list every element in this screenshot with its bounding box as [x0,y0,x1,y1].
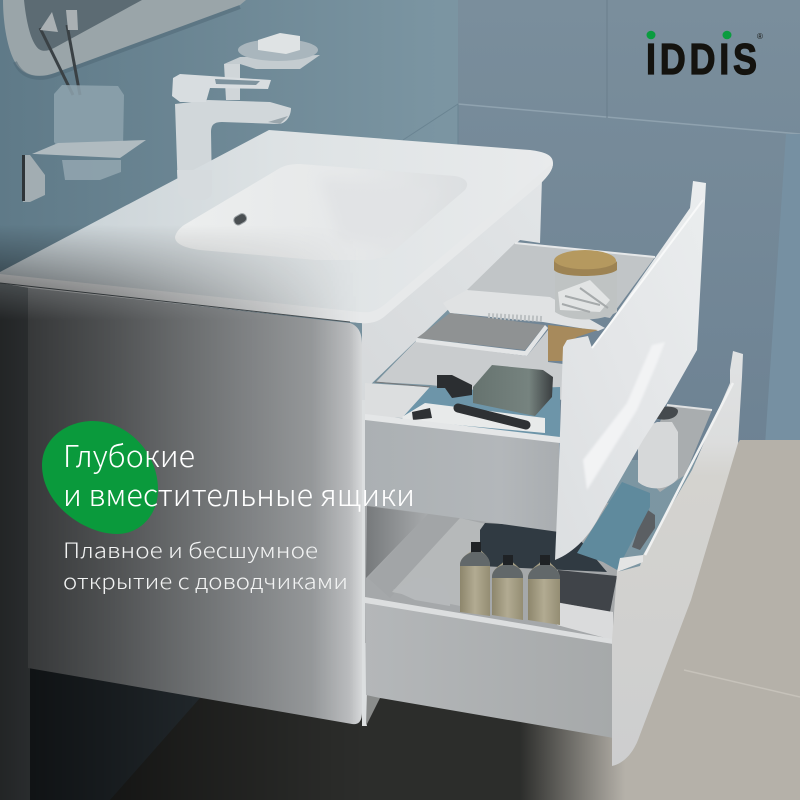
mirror [3,0,246,78]
subheading [63,535,348,596]
headline: и вместительные ящики [63,471,415,515]
logo dot left [646,31,656,39]
upper drawer [365,181,706,560]
cabinet front strip [362,323,367,726]
glass cup [54,85,124,152]
front floor [365,383,430,418]
upper drawer front [555,181,706,560]
logo: IDDIS: IDDIS [646,36,757,84]
lower drawer interior [365,503,620,643]
roll [393,577,450,606]
bottles [460,542,560,625]
pump bottle [473,365,553,416]
soap dish [224,33,320,100]
faucet [172,74,291,200]
lower drawer side [365,598,613,738]
inner floor [443,290,605,331]
faucet base over counter [177,170,212,200]
countertop with sink [0,130,553,323]
headline [63,432,415,515]
left vignette shading [0,225,360,800]
counter lip [0,163,553,323]
folded towel [403,387,560,438]
lower drawer [365,351,743,766]
back wall [467,243,655,318]
wood board [548,325,598,361]
cup shelf [32,140,146,158]
drain [232,212,248,226]
logo dot right [722,31,732,39]
basin [175,164,467,260]
cabinet side panel [28,287,362,724]
drawer floor [557,603,613,640]
counter surface [0,130,553,323]
drain holes [488,316,542,319]
headline: Глубокие [63,432,195,476]
toothbrush holder [22,10,146,202]
tray front wall [376,330,563,400]
tray [417,313,545,350]
razor tray [402,403,545,433]
wall bracket [23,155,45,202]
upper drawer side [365,415,559,532]
jar [554,250,617,320]
upper opening panel [362,178,542,400]
handle recess [583,342,665,490]
subheading: открытие с доводчиками [63,566,348,596]
registered mark: ® [757,32,763,41]
towels stack [480,482,655,612]
razor handle [458,408,526,425]
green blob accent [42,421,158,534]
vanity cabinet [28,178,542,726]
lower drawer front [612,351,743,766]
far wall of lower drawer [640,405,712,492]
white bottle [638,407,678,488]
toothbrushes [40,10,80,95]
subheading: Плавное и бесшумное [63,535,318,565]
